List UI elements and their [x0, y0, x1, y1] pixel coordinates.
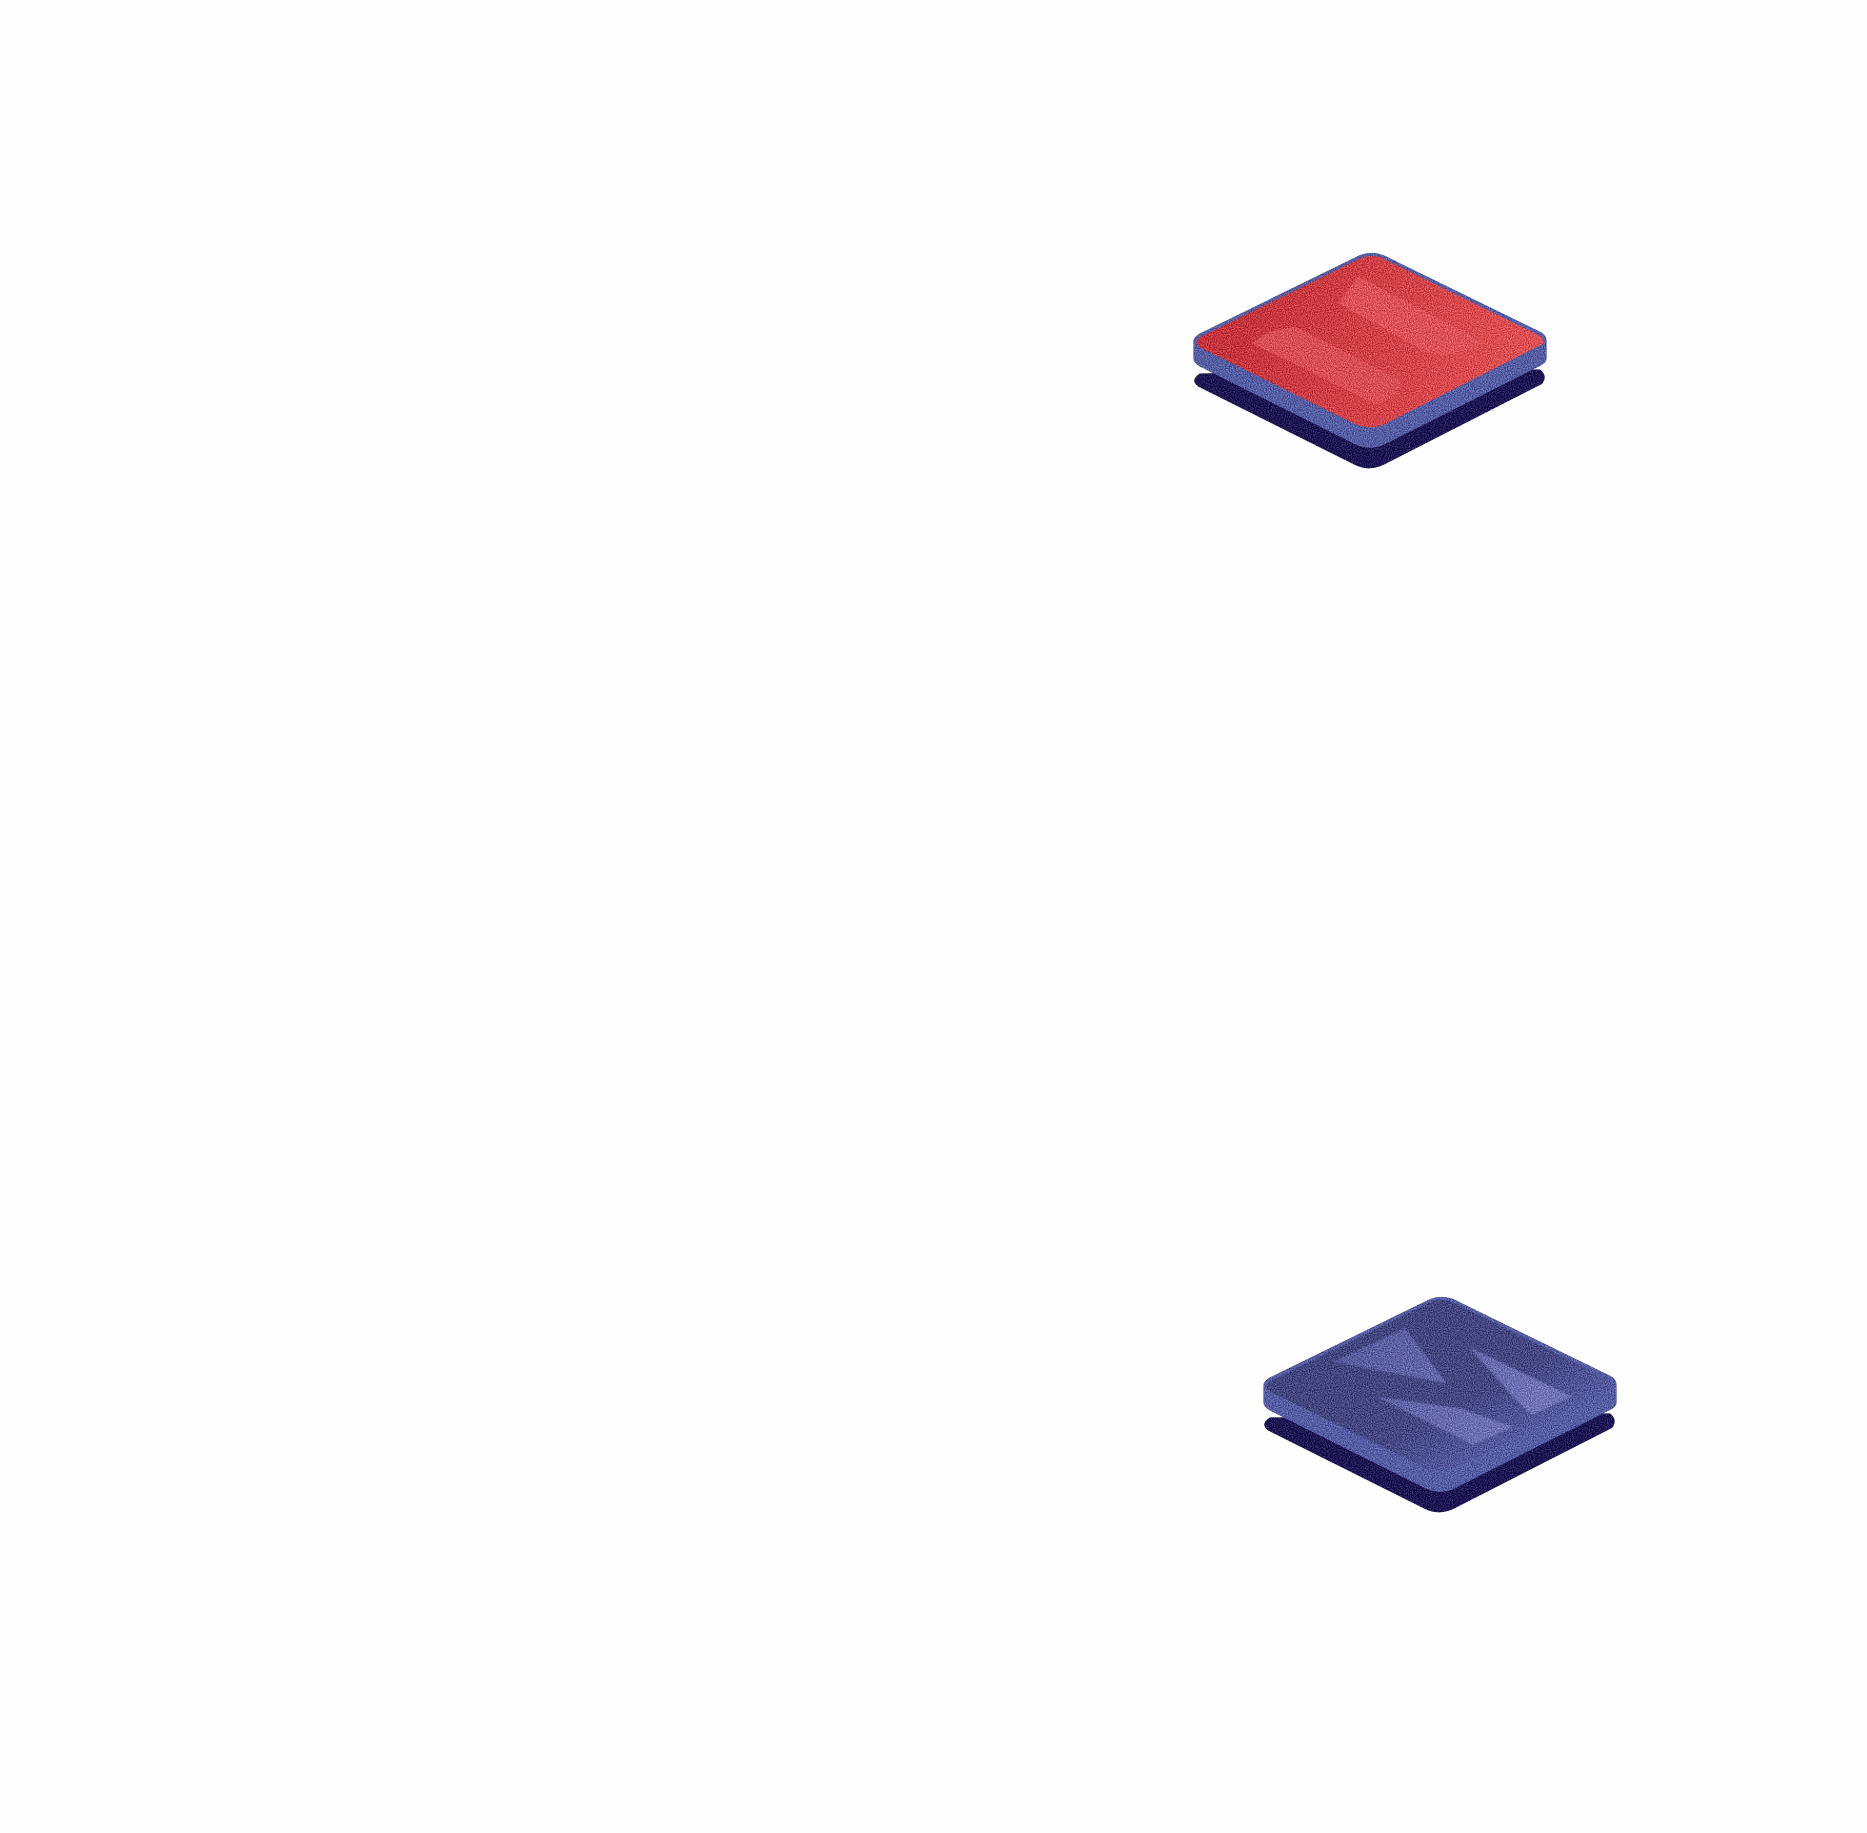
tile shadow: [1194, 369, 1545, 468]
tile side: [1193, 253, 1547, 448]
tile top face: [1267, 1300, 1613, 1471]
highlight stripe lower: [1252, 327, 1402, 405]
icon: blue isometric tile: [1263, 1297, 1617, 1512]
highlight triangle upper left: [1333, 1328, 1447, 1383]
highlight stripe upper: [1338, 277, 1485, 356]
tile top face: [1197, 256, 1543, 427]
tile side: [1263, 1297, 1617, 1492]
highlight triangle lower: [1377, 1397, 1513, 1445]
highlight triangle right: [1468, 1347, 1572, 1415]
icon: red isometric tile: [1193, 253, 1547, 468]
tile shadow: [1264, 1413, 1615, 1512]
